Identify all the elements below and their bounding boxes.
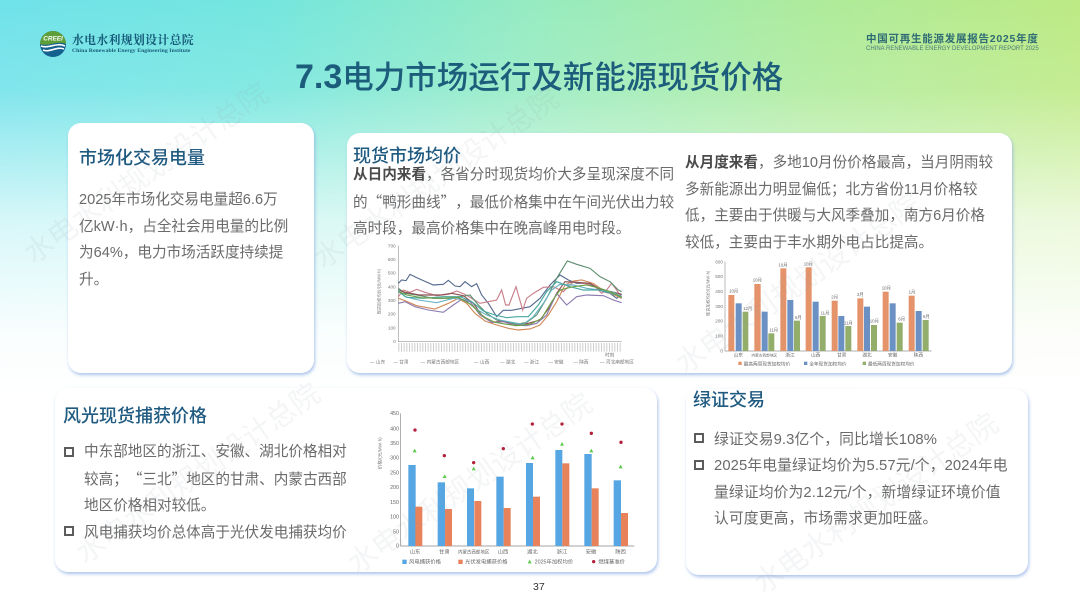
text: market trading body: [79, 191, 288, 288]
chart: monthly spot price bars: 6月: [923, 314, 930, 320]
chart: monthly spot price bars: 6月: [795, 315, 802, 321]
bullet list: green certificate: 绿证交易9.3亿个，同比增长108%: [714, 432, 937, 448]
chart: monthly spot price bars: 现货加权均价/(元/MW·h): [705, 270, 711, 316]
chart: intraday spot price lines: — 陕西: [573, 358, 589, 365]
chart: intraday spot price lines: 600: [388, 257, 396, 262]
bullet list: green certificate: [694, 431, 1008, 527]
text: market trading body: 为64%，电力市场活跃度持续提: [79, 245, 283, 261]
bullet list: capture price: ”: [172, 468, 186, 489]
bullet list: green certificate: 认可度更高，市场需求更加旺盛。: [714, 511, 937, 527]
panel: spot market average price: [347, 133, 1012, 373]
text: market trading body: 2025年市场化交易电量超6.6万: [79, 192, 278, 208]
bullet list: green certificate: 2025年电量绿证均价为5.57元/个，2024年电: [714, 458, 1008, 474]
logo: CREEI institute: CREEI: [43, 36, 63, 42]
chart: monthly spot price bars: 400: [715, 289, 723, 294]
bullet list: capture price: 风电捕获均价总体高于光伏发电捕获均价: [84, 525, 347, 541]
chart: monthly spot price bars: 10月: [804, 261, 813, 267]
bullet list: capture price: 较高； 三北 地区的甘肃、内蒙古西部: [84, 472, 347, 488]
chart: monthly spot price bars: 0: [720, 348, 723, 353]
chart: wind and solar capture price bars: 甘肃: [439, 548, 450, 556]
chart: wind and solar capture price bars: 300: [390, 456, 399, 462]
chart: monthly spot price bars: 200: [715, 319, 723, 324]
chart: wind and solar capture price bars: 山西: [498, 548, 508, 556]
panel: wind solar capture price: [55, 388, 657, 572]
text: monthly: [685, 154, 993, 251]
text: intraday: ”: [441, 191, 455, 212]
chart: wind and solar capture price bars: 150: [390, 500, 399, 506]
title: 7.3电力市场运行及新能源现货价格: [295, 58, 783, 96]
chart: wind and solar capture price bars: 350: [390, 441, 399, 447]
text: intraday: 从日内来看，各省分时现货均价大多呈现深度不同: [353, 167, 674, 183]
chart: wind and solar capture price bars: 2025年加权均价: [535, 558, 574, 566]
report name header: [866, 33, 1039, 52]
chart: monthly spot price bars: 陕西: [914, 352, 923, 359]
chart: monthly spot price bars: 内蒙古西部地区: [752, 353, 777, 358]
report name header: 中国可再生能源发展报告2025年度: [866, 33, 1039, 45]
chart: monthly spot price bars: 最高两周现货加权均价: [744, 360, 791, 367]
chart: intraday spot price lines: 0: [393, 339, 396, 344]
chart: intraday spot price lines: 时刻: [605, 352, 615, 359]
text: intraday: [353, 166, 674, 237]
chart: intraday spot price lines: — 内蒙古西部地区: [421, 358, 460, 365]
bullet list: green certificate: 量绿证均价为2.12元/个，新增绿证环境价值: [714, 485, 1001, 501]
chart: intraday spot price lines: 100: [388, 325, 396, 330]
chart: intraday spot price lines: — 湖北: [500, 358, 516, 365]
text: intraday: 高时段，最高价格集中在晚高峰用电时段。: [353, 221, 630, 237]
chart: monthly spot price bars: 11月: [769, 328, 778, 334]
chart: wind and solar capture price bars: 燃煤基准价: [598, 558, 626, 566]
watermark: 水电水利规划设计总院: [18, 78, 274, 270]
chart: intraday spot price lines: — 安徽: [548, 358, 564, 365]
chart: monthly spot price bars: 300: [715, 304, 723, 309]
text: monthly: 低，主要由于供暖与大风季叠加，南方6月价格: [685, 208, 985, 224]
bullet list: capture price: 中东部地区的浙江、安徽、湖北价格相对: [84, 444, 347, 460]
chart: monthly spot price bars: 2月: [857, 292, 864, 298]
watermark: 水电水利规划设计总院: [308, 83, 564, 275]
logo: CREEI institute: [40, 31, 194, 57]
text: intraday: “: [368, 191, 382, 212]
chart: intraday spot price lines: — 山西: [474, 358, 490, 365]
chart: wind and solar capture price bars: 250: [390, 470, 399, 476]
chart: intraday spot price lines: — 河北南部地区: [600, 358, 634, 365]
chart: monthly spot price bars: 12月: [743, 306, 752, 312]
bullet list: capture price: “: [128, 468, 142, 489]
heading: market trading: 市场化交易电量: [79, 148, 205, 168]
text: market trading body: 亿kW·h，占全社会用电量的比例: [79, 219, 288, 235]
chart: intraday spot price lines: — 浙江: [524, 358, 540, 365]
chart: monthly spot price bars: 100: [715, 334, 723, 339]
heading: spot market: 现货市场均价: [353, 146, 461, 166]
chart: wind and solar capture price bars: 0: [396, 544, 399, 550]
heading: green certificate: 绿证交易: [693, 390, 765, 410]
logo: CREEI institute: 水电水利规划设计总院: [72, 33, 194, 47]
chart: monthly spot price bars: 全年现货加权均价: [809, 360, 847, 367]
chart: wind and solar capture price bars: 50: [393, 529, 399, 535]
chart: monthly spot price bars: 山东: [734, 352, 743, 359]
chart: monthly spot price bars: 10月: [882, 286, 891, 292]
chart: intraday spot price lines: 现货加权均价/(元/MW·h): [376, 268, 382, 314]
chart: wind and solar capture price bars: 陕西: [615, 548, 626, 556]
chart: wind and solar capture price bars: 200: [390, 485, 399, 491]
text: monthly: 较低，主要由于丰水期外电占比提高。: [685, 235, 933, 251]
chart: intraday spot price lines: 200: [388, 312, 396, 317]
watermark: 水电水利规划设计总院: [70, 378, 326, 570]
logo: CREEI institute: China Renewable Energy Engineering Institute: [72, 48, 191, 54]
chart: wind and solar capture price bars: 风电捕获价格: [409, 558, 442, 566]
report name header: CHINA RENEWABLE ENERGY DEVELOPMENT REPORT 2025: [866, 46, 1039, 52]
chart: intraday spot price lines: 500: [388, 271, 396, 276]
chart: wind and solar capture price bars: 450: [390, 411, 399, 417]
panel: green certificate trading: [686, 389, 1028, 575]
watermark: 水电水利规划设计总院: [748, 408, 1004, 600]
panel: market trading volume: [68, 123, 314, 373]
chart: monthly spot price bars: 湖北: [862, 352, 872, 359]
chart: monthly spot price bars: 甘肃: [837, 352, 847, 359]
text: intraday: 的 鸭形曲线 ，最低价格集中在午间光伏出力较: [353, 195, 674, 211]
chart: monthly spot price bars: 600: [715, 259, 723, 264]
chart: wind and solar capture price bars: 400: [390, 426, 399, 432]
chart: monthly spot price bars: 10月: [729, 289, 738, 295]
chart: wind and solar capture price bars: 光伏发电捕获价格: [465, 558, 508, 566]
chart: monthly spot price bars: 6月: [898, 316, 905, 322]
chart: intraday spot price lines: — 甘肃: [393, 358, 409, 365]
chart: monthly spot price bars: 10月: [870, 319, 879, 325]
chart: intraday spot price lines: 700: [388, 243, 396, 248]
bullet list: capture price: [64, 443, 347, 541]
chart: monthly spot price bars: 500: [715, 274, 723, 279]
text: monthly: 从月度来看，多地10月份价格最高，当月阴雨较: [685, 155, 993, 171]
chart: monthly spot price bars: 1月: [909, 290, 915, 296]
chart: monthly spot price bars: 安徽: [888, 352, 898, 359]
chart: wind and solar capture price bars: 湖北: [527, 548, 538, 556]
chart: monthly spot price bars: 11月: [844, 320, 853, 326]
chart: wind and solar capture price bars: 安徽: [586, 548, 597, 556]
text: market trading body: 升。: [79, 272, 108, 288]
chart: monthly spot price bars: 10月: [753, 278, 762, 284]
chart: wind and solar capture price bars: 浙江: [557, 548, 568, 556]
heading: capture price: 风光现货捕获价格: [63, 406, 207, 426]
watermark: 水电水利规划设计总院: [670, 188, 926, 380]
chart: wind and solar capture price bars: 山东: [410, 548, 420, 556]
chart: monthly spot price bars: 11月: [821, 310, 829, 316]
watermark: 水电水利规划设计总院: [342, 388, 598, 580]
chart: intraday spot price lines: 300: [388, 298, 396, 303]
chart: monthly spot price bars: 10月: [778, 262, 788, 268]
chart: monthly spot price bars: 浙江: [785, 352, 795, 359]
chart: intraday spot price lines: 400: [388, 284, 396, 289]
chart: monthly spot price bars: 最低两周现货加权均价: [868, 360, 915, 367]
chart: intraday spot price lines: — 山东: [370, 358, 386, 365]
text: monthly: 多新能源出力明显偏低；北方省份11月价格较: [685, 182, 977, 198]
chart: monthly spot price bars: 2月: [831, 294, 838, 300]
chart: monthly spot price bars: 山西: [811, 352, 821, 359]
chart: wind and solar capture price bars: 价格/(元/MW·h): [377, 437, 384, 469]
bullet list: capture price: 地区价格相对较低。: [84, 498, 215, 514]
chart: wind and solar capture price bars: 100: [390, 515, 399, 521]
chart: wind and solar capture price bars: 内蒙古西部地区: [458, 549, 490, 556]
page number: 37: [533, 581, 545, 593]
